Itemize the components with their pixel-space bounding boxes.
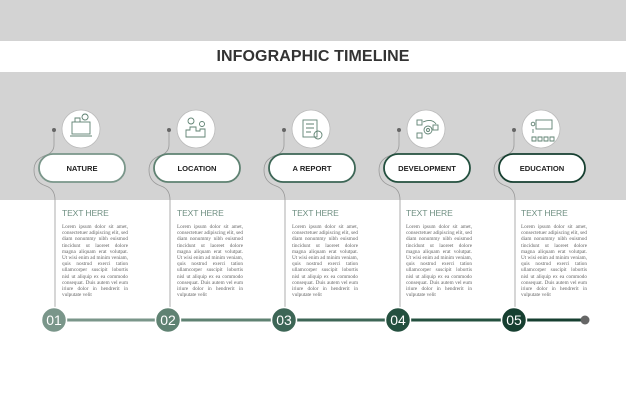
text: Lorem ipsum dolor sit amet, consectetuer adipiscing elit, sed diam nonummy nibh euismod tincidunt ut laoreet dolore magna aliquam erat volutpat. Ut wisi enim ad minim veniam, quis nostrud exerci tation ullamcorper suscipit lobortis nisl ut aliquip ex ea commodo consequat. Duis autem vel eum iriure dolor in hendrerit in vulputate velit [521,224,587,298]
text: LOCATION [177,164,217,173]
text: Lorem ipsum dolor sit amet, consectetuer adipiscing elit, sed diam nonummy nibh euismod tincidunt ut laoreet dolore magna aliquam erat volutpat. Ut wisi enim ad minim veniam, quis nostrud exerci tation ullamcorper suscipit lobortis nisl ut aliquip ex ea commodo consequat. Duis autem vel eum iriure dolor in hendrerit in vulputate velit [292,224,358,298]
pills [39,154,585,182]
title band [0,41,626,72]
timeline graphics: 03 [276,312,292,328]
text: Lorem ipsum dolor sit amet, consectetuer adipiscing elit, sed diam nonummy nibh euismod tincidunt ut laoreet dolore magna aliquam erat volutpat. Ut wisi enim ad minim veniam, quis nostrud exerci tation ullamcorper suscipit lobortis nisl ut aliquip ex ea commodo consequat. Duis autem vel eum iriure dolor in hendrerit in vulputate velit [177,224,243,298]
text: TEXT HERE [292,208,339,218]
text: Lorem ipsum dolor sit amet, consectetuer adipiscing elit, sed diam nonummy nibh euismod tincidunt ut laoreet dolore magna aliquam erat volutpat. Ut wisi enim ad minim veniam, quis nostrud exerci tation ullamcorper suscipit lobortis nisl ut aliquip ex ea commodo consequat. Duis autem vel eum iriure dolor in hendrerit in vulputate velit [62,224,128,298]
text: A REPORT [293,164,331,173]
text: EDUCATION [520,164,564,173]
timeline graphics: 01 [46,312,62,328]
text: TEXT HERE [521,208,568,218]
text: DEVELOPMENT [398,164,456,173]
icons [70,114,554,141]
number circles [42,308,526,332]
icon circles [62,110,560,148]
text: TEXT HERE [406,208,453,218]
column connectors [34,130,515,312]
title: INFOGRAPHIC TIMELINE [216,48,410,65]
timeline bar [54,316,590,324]
background bands [0,0,626,200]
timeline graphics: 02 [160,312,176,328]
text: Lorem ipsum dolor sit amet, consectetuer adipiscing elit, sed diam nonummy nibh euismod tincidunt ut laoreet dolore magna aliquam erat volutpat. Ut wisi enim ad minim veniam, quis nostrud exerci tation ullamcorper suscipit lobortis nisl ut aliquip ex ea commodo consequat. Duis autem vel eum iriure dolor in hendrerit in vulputate velit [406,224,472,298]
timeline graphics: 05 [506,312,522,328]
pill labels: NATURE [66,164,98,173]
timeline graphics: 04 [390,312,406,328]
column texts: TEXT HERE [62,208,109,218]
text: TEXT HERE [177,208,224,218]
